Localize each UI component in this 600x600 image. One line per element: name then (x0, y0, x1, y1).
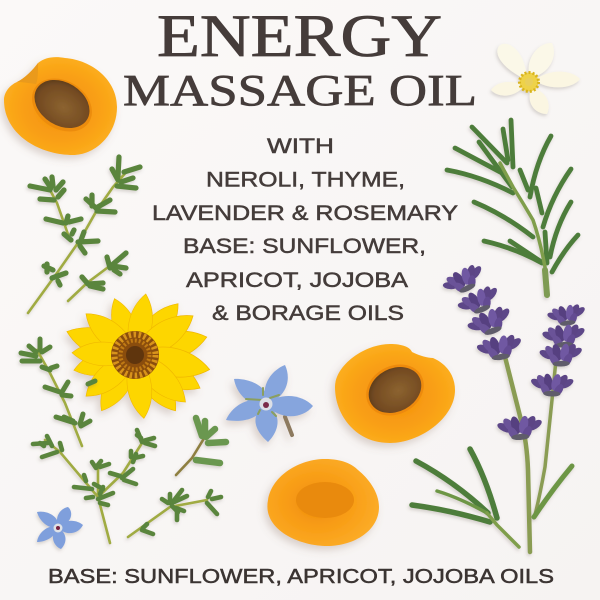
ingredients text block: LAVENDER & ROSEMARY (152, 202, 458, 225)
icon: small borage flower (37, 507, 83, 549)
title: MASSAGE OIL: MASSAGE OIL (123, 66, 477, 115)
icon: sunflower (63, 292, 212, 420)
icon: neroli white flower (491, 43, 580, 114)
ingredients text block: & BORAGE OILS (212, 302, 404, 325)
ingredients text block: NEROLI, THYME, (206, 168, 405, 192)
title: ENERGY: ENERGY (157, 3, 442, 69)
ingredients text block: BASE: SUNFLOWER, (183, 235, 426, 258)
icon: thyme sprig, left middle (21, 339, 95, 446)
icon: thyme branching sprig, bottom left (33, 430, 155, 543)
ingredients text block: WITH (267, 135, 334, 158)
icon: large borage flower (226, 365, 313, 442)
ingredients text block: APRICOT, JOJOBA (186, 269, 408, 292)
icon: lavender sprigs (438, 259, 588, 552)
ingredients text block (152, 135, 458, 325)
icon: thyme small sprig, centre (176, 418, 226, 475)
icon: apricot half with pit, centre right (335, 344, 455, 443)
footer base oils line: BASE: SUNFLOWER, APRICOT, JOJOBA OILS (48, 566, 554, 588)
icon: apricot half without pit, bottom (267, 459, 379, 546)
icon: rosemary cutting, bottom right (412, 449, 572, 547)
icon: rosemary sprig, top right (447, 120, 578, 295)
icon: apricot half with pit, top left (4, 57, 117, 155)
icon: thyme sprigs, upper left (28, 157, 140, 313)
icon: thyme sprig, bottom centre (128, 490, 221, 537)
